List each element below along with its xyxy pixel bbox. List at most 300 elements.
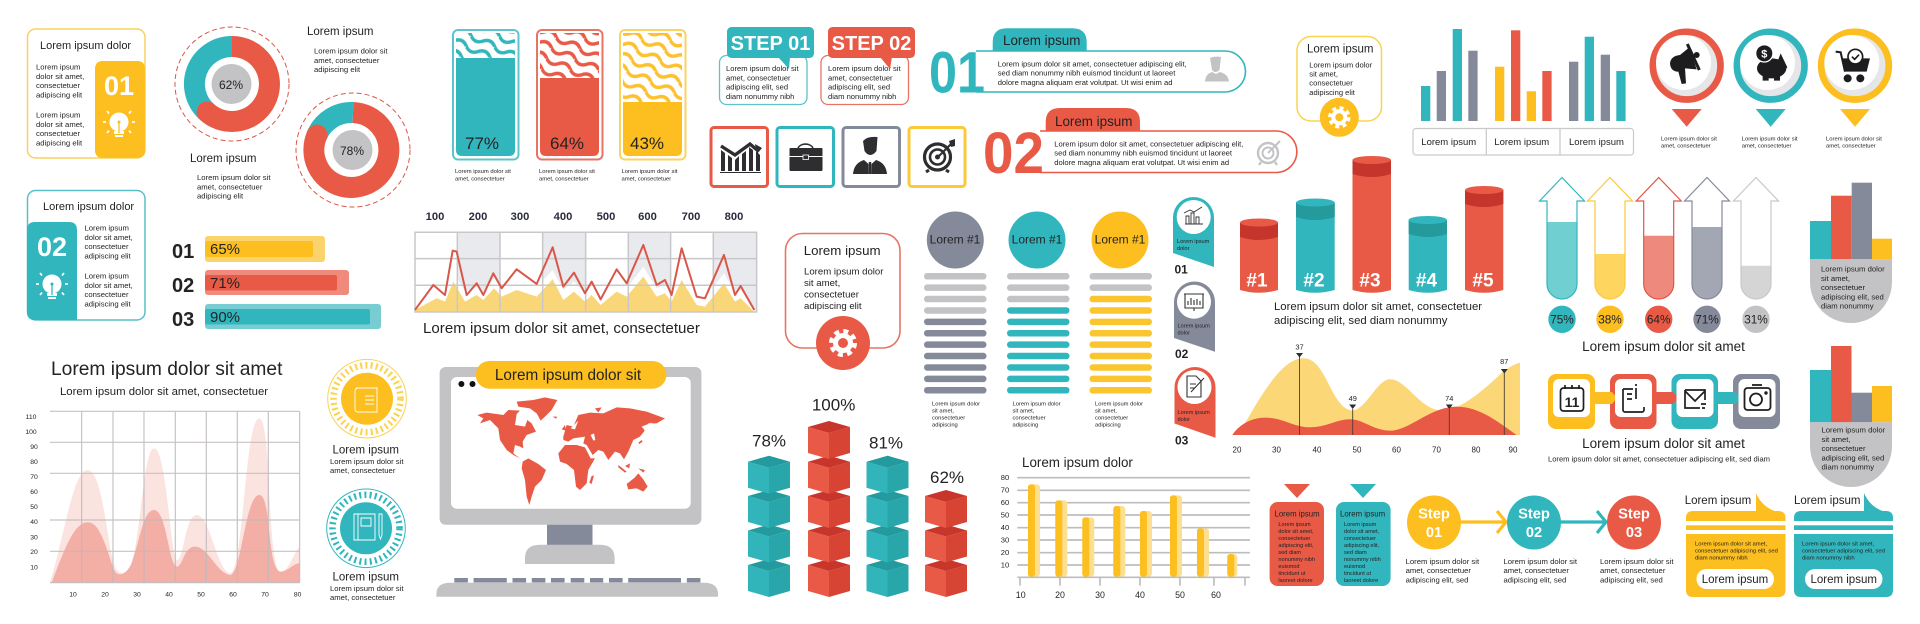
stripe column: teal: adipiscing	[1012, 422, 1038, 428]
step flow	[1406, 496, 1674, 584]
ribbon pin 01: dolor	[1177, 246, 1190, 252]
stack 100%: 100%	[812, 396, 855, 415]
step card 01: adipiscing elit, sed	[726, 82, 788, 92]
ribbon pin 03: dolor	[1178, 417, 1190, 423]
area chart: pink peaks: 50	[197, 592, 205, 598]
step 02	[1504, 496, 1578, 584]
card: teal with triangle: consectetuer	[1344, 536, 1376, 542]
bar chart: yellow bars: 50	[1175, 590, 1185, 600]
card: teal with triangle	[1336, 484, 1391, 586]
bars and bowl 1: sit amet,	[1821, 274, 1850, 283]
area chart: pink peaks: 70	[261, 592, 269, 598]
step 01: Step	[1418, 506, 1450, 522]
bars and bowl 2: adipiscing elit, sed	[1822, 453, 1884, 462]
card: teal with triangle: Lorem ipsum	[1340, 510, 1385, 518]
gauge: 43%: Lorem ipsum dolor sit	[622, 169, 678, 175]
callout: red with gear: consectetuer	[804, 290, 860, 300]
text block: card 01: dolor sit amet,	[36, 120, 84, 129]
badge: teal notebook: amet, consectetuer	[330, 593, 396, 602]
text block: card 01: Lorem ipsum	[36, 62, 80, 72]
bar chart: yellow bars: 30	[1095, 590, 1105, 600]
icon: grey person	[1205, 57, 1229, 82]
area chart: yellow and red with markers: 87	[1500, 357, 1508, 366]
process flow icons	[1548, 374, 1780, 429]
heading: process flow bottom	[1548, 436, 1770, 464]
banner 02: Lorem ipsum dolor sit amet, consectetuer adipiscing elit,	[1054, 140, 1243, 148]
progress bars 01-03: 03	[172, 309, 194, 331]
icon: megaphone	[1670, 44, 1700, 84]
gauge: 64%: Lorem ipsum dolor sit	[539, 169, 595, 175]
teal tab with number and bulb: 02	[37, 232, 67, 262]
area chart: pink peaks: 100	[25, 429, 37, 436]
text: donut 62 caption: adipiscing elit	[197, 192, 244, 200]
area chart: pink peaks: 40	[30, 519, 38, 526]
title pill: Lorem ipsum dolor sit	[495, 367, 642, 384]
text block: card 01: dolor sit amet,	[36, 72, 84, 81]
map pin: piggy bank: amet, consectetuer	[1742, 144, 1791, 150]
area chart: pink peaks: 40	[165, 592, 173, 598]
speech card: teal: Lorem ipsum	[1810, 574, 1877, 586]
arrow tube 75%	[1540, 178, 1584, 333]
area chart: pink peaks: 60	[229, 592, 237, 598]
line chart with yellow area	[415, 211, 757, 337]
speech card: teal: consectetuer adipiscing elit, sed	[1802, 549, 1885, 555]
card: red with triangle: Lorem ipsum	[1274, 510, 1320, 518]
step 03	[1600, 496, 1674, 584]
stripe column: grey: adipiscing	[932, 422, 958, 428]
banner 02: 02	[983, 121, 1044, 186]
step 03: amet, consectetuer	[1600, 566, 1666, 575]
banner 01: Lorem ipsum dolor sit amet, consectetuer adipiscing elit,	[998, 60, 1187, 68]
banner 02	[983, 108, 1297, 186]
badge: yellow book: amet, consectetuer	[330, 466, 396, 475]
ribbon pin 02: Lorem ipsum	[1178, 324, 1210, 330]
area chart: pink peaks: 80	[294, 592, 302, 598]
gauge: 77%	[453, 30, 518, 182]
text block: card 02: adipiscing elit	[84, 299, 132, 308]
cylinder #3: #3	[1359, 270, 1381, 292]
step 02: amet, consectetuer	[1504, 566, 1569, 575]
gauge: 77%: 77%	[465, 134, 499, 153]
icon: calendar	[1560, 385, 1584, 411]
stripe column: yellow: consectetuer	[1095, 416, 1128, 422]
arrow tube 38%	[1588, 178, 1632, 333]
gauge: 43%	[620, 30, 686, 182]
arrow tube 38%: 38%	[1598, 312, 1622, 326]
bars and bowl 2: Lorem ipsum dolor	[1822, 426, 1886, 434]
step card 02: adipiscing elit, sed	[828, 82, 890, 92]
arrow tube 31%	[1734, 178, 1778, 333]
banner 01: Lorem ipsum	[1003, 33, 1080, 48]
arrow: step 1 to 2	[1460, 511, 1506, 533]
stack 62%: 62%	[930, 468, 964, 487]
stripe column: teal: Lorem #1	[1012, 232, 1063, 246]
map pin: piggy bank: Lorem ipsum dolor sit	[1742, 136, 1798, 142]
bar chart: yellow bars: 40	[1135, 590, 1145, 600]
area chart: pink peaks: 90	[30, 444, 38, 451]
stripe column: yellow	[1090, 212, 1152, 428]
step 01: adipiscing elit, sed	[1406, 575, 1468, 584]
heading: card 02: Lorem ipsum dolor	[43, 201, 134, 213]
legend table: Lorem ipsum	[1421, 137, 1476, 148]
step card 01: amet, consectetuer	[726, 73, 791, 82]
speech card: teal	[1794, 493, 1893, 597]
card: red with triangle: tincidunt ut	[1278, 571, 1306, 577]
card: teal with triangle: tincidunt ut	[1344, 571, 1371, 577]
card: red with triangle: adipiscing elit,	[1278, 543, 1314, 549]
bars and bowl 1: diam nonummy	[1821, 302, 1874, 310]
ribbon pin 03: Lorem ipsum	[1178, 410, 1210, 416]
axis labels	[426, 211, 743, 223]
callout: yellow with gear: adipiscing elit	[1309, 88, 1356, 97]
callout: yellow with gear: sit amet,	[1309, 70, 1338, 79]
bars and bowl 2: consectetuer	[1822, 444, 1866, 453]
card: red with triangle: sed diam	[1278, 550, 1301, 556]
cylinder #3	[1352, 156, 1391, 293]
callout: red with gear: Lorem ipsum dolor	[804, 266, 884, 278]
card: teal with triangle: Lorem ipsum	[1344, 522, 1377, 528]
panel: card 01	[28, 29, 145, 158]
bar chart: yellow bars: 20	[1055, 590, 1065, 600]
badge: teal notebook: Lorem ipsum	[332, 572, 399, 584]
bar chart: yellow bars: 40	[1001, 523, 1009, 532]
stand and keyboard	[436, 525, 718, 597]
stripe column: grey: Lorem #1	[930, 232, 981, 246]
text: donut 62 caption	[190, 153, 271, 200]
step card 01	[720, 27, 814, 104]
area chart: pink peaks	[25, 411, 302, 598]
axis labels: 800	[725, 211, 743, 223]
bars and bowl 1: adipiscing elit, sed	[1821, 292, 1884, 301]
legend table: Lorem ipsum	[1494, 137, 1549, 148]
speech card: yellow: Lorem ipsum	[1702, 574, 1768, 586]
text: donut 62 caption: amet, consectetuer	[197, 182, 263, 191]
stripe column: yellow: Lorem #1	[1095, 232, 1146, 246]
axis labels: 500	[597, 211, 615, 223]
bar chart: yellow bars: 50	[1001, 510, 1009, 520]
donut chart: 62%	[175, 27, 289, 141]
area chart: yellow and red with markers: 50	[1353, 446, 1362, 454]
axis labels: 700	[682, 211, 700, 223]
area chart: pink peaks: 80	[30, 459, 38, 466]
step 03: Step	[1618, 506, 1650, 522]
text: donut 78 caption	[307, 26, 388, 74]
gauge: 43%: 43%	[630, 134, 664, 153]
step 02: Lorem ipsum dolor sit	[1504, 557, 1578, 566]
banner 01: dolore magna aliquam erat volutpat. Ut wisi enim ad	[998, 78, 1172, 87]
text block: card 02: consectetuer	[84, 242, 129, 251]
stripe column: teal	[1007, 212, 1070, 428]
axis labels: 100	[426, 211, 444, 223]
heading: process flow bottom: Lorem ipsum dolor sit amet, consectetuer adipiscing elit, sed diam	[1548, 454, 1770, 464]
banner 02: Lorem ipsum	[1055, 114, 1132, 129]
chart caption: Lorem ipsum dolor sit amet, consectetuer	[423, 320, 700, 337]
callout: red with gear	[786, 234, 900, 370]
cylinder #4	[1409, 216, 1447, 293]
banner 01	[929, 28, 1246, 105]
badge: yellow book: Lorem ipsum dolor sit	[330, 457, 404, 466]
banner 01: sed diam nonummy nibh euismod tincidunt ut laoreet	[998, 69, 1176, 78]
icon: chart box	[711, 128, 768, 186]
text block: card 02: dolor sit amet,	[84, 281, 133, 290]
donut chart: 78%: 78%	[340, 144, 364, 158]
bars and bowl 1	[1810, 183, 1892, 323]
map pin: megaphone: amet, consectetuer	[1661, 144, 1711, 150]
bar chart: yellow bars: 10	[1016, 590, 1026, 600]
icon: document	[1623, 384, 1644, 412]
bar chart: yellow bars: 10	[1001, 560, 1009, 570]
step card 02: diam nonummy nibh	[828, 92, 896, 101]
card: teal with triangle: dolor sit amet,	[1344, 529, 1380, 535]
map pin: shopping cart: Lorem ipsum dolor sit	[1826, 136, 1882, 142]
text block: card 02: Lorem ipsum	[84, 272, 129, 280]
step card 01: STEP 01	[731, 33, 810, 55]
gauge: 64%: 64%	[550, 134, 584, 153]
icon: person box	[843, 128, 900, 186]
title pill	[476, 361, 666, 389]
world map	[477, 397, 665, 505]
text: donut 62 caption: Lorem ipsum	[190, 153, 256, 165]
legend table	[1413, 128, 1634, 155]
step 03: Lorem ipsum dolor sit	[1600, 557, 1674, 566]
icon: grey target	[1258, 141, 1280, 165]
text block: card 01: adipiscing elit	[36, 90, 83, 99]
stack 81%	[866, 434, 908, 597]
stripe column: teal: sit amet,	[1012, 408, 1035, 414]
icon: target box	[909, 128, 965, 186]
icon: mini chart	[1184, 207, 1203, 224]
text: donut 78 caption: adipiscing elit	[314, 65, 361, 74]
screen bezel	[440, 367, 701, 525]
arrow tube 71%	[1684, 178, 1730, 333]
text block: card 02: dolor sit amet,	[84, 233, 133, 242]
text block: card 01: adipiscing elit	[36, 138, 83, 147]
card: teal with triangle: nonummy nibh	[1344, 557, 1381, 563]
area chart: yellow and red with markers	[1232, 342, 1520, 454]
axis labels: 300	[511, 211, 529, 223]
ribbon pin 01: Lorem ipsum	[1177, 239, 1210, 245]
speech card: teal: Lorem ipsum	[1794, 495, 1860, 507]
callout: yellow with gear: Lorem ipsum dolor	[1309, 60, 1373, 70]
text: donut 78 caption: Lorem ipsum dolor sit	[314, 46, 388, 56]
heading: left chart: Lorem ipsum dolor sit amet, consectetuer	[60, 386, 268, 398]
ribbon pin 02	[1174, 282, 1215, 361]
gauge: 77%: Lorem ipsum dolor sit	[455, 169, 511, 175]
step 01: 01	[1426, 525, 1442, 541]
ribbon pin 03: 03	[1175, 434, 1189, 448]
area chart: yellow and red with markers: 74	[1445, 394, 1453, 403]
bars and bowl 2	[1810, 346, 1892, 487]
stripe column: yellow: Lorem ipsum dolor	[1095, 402, 1143, 408]
area chart: pink peaks: 10	[69, 592, 77, 598]
bar chart: yellow bars	[1001, 455, 1250, 600]
area chart: yellow and red with markers: 70	[1432, 446, 1441, 454]
arrow tube 31%: 31%	[1744, 312, 1768, 326]
speech card: yellow: Lorem ipsum	[1685, 495, 1751, 507]
text block: card 01: consectetuer	[36, 129, 80, 138]
heading: process flow bottom: Lorem ipsum dolor sit amet	[1582, 436, 1745, 451]
area chart: yellow and red with markers: 80	[1472, 446, 1481, 454]
step 01	[1406, 496, 1480, 584]
map pin: shopping cart	[1821, 32, 1889, 150]
gauge: 64%: amet, consectetuer	[539, 176, 589, 182]
heading: card 01: Lorem ipsum dolor	[40, 40, 131, 52]
heading: process flow top: Lorem ipsum dolor sit amet	[1582, 339, 1745, 354]
callout: red with gear: Lorem ipsum	[804, 243, 881, 258]
bar chart: yellow bars: 20	[1001, 548, 1009, 557]
ribbon pin 03	[1174, 367, 1216, 448]
bar chart: yellow bars: 70	[1001, 486, 1009, 495]
banner 02: dolore magna aliquam erat volutpat. Ut wisi enim ad	[1054, 158, 1229, 167]
banner 02: sed diam nonummy nibh euismod tincidunt ut laoreet	[1054, 149, 1233, 158]
cylinder #4: #4	[1416, 270, 1437, 292]
icon: mini document and pen	[1187, 376, 1204, 397]
arrow tube 71%: 71%	[1695, 312, 1719, 326]
icon: calendar: 11	[1565, 394, 1580, 410]
caption: adipiscing elit, sed diam nonummy	[1274, 315, 1448, 327]
area chart: pink peaks: 50	[30, 504, 38, 511]
map pin: shopping cart: amet, consectetuer	[1826, 144, 1876, 150]
area chart: yellow and red with markers: 49	[1349, 394, 1357, 403]
icon: briefcase box	[777, 128, 834, 186]
badge: yellow book	[328, 359, 406, 475]
map pin: piggy bank	[1737, 32, 1804, 150]
heading: left chart: Lorem ipsum dolor sit amet	[51, 359, 283, 380]
ribbon pin 01	[1173, 197, 1214, 276]
card: red with triangle: nonummy nibh	[1278, 557, 1315, 563]
area chart: pink peaks: 20	[101, 592, 109, 598]
text: donut 78 caption: amet, consectetuer	[314, 56, 380, 65]
bar chart: yellow bars: 80	[1001, 473, 1009, 482]
step 02: Step	[1518, 506, 1550, 522]
card: red with triangle: dolor sit amet,	[1278, 529, 1314, 535]
progress bars 01-03: 01	[172, 241, 194, 263]
area chart: yellow and red with markers: 60	[1392, 446, 1401, 454]
icon: piggy bank: $	[1761, 48, 1767, 60]
step card 02: Lorem ipsum dolor sit	[828, 64, 901, 73]
icon: mail	[1685, 390, 1706, 408]
card: red with triangle	[1270, 484, 1324, 586]
icon: cart	[1836, 49, 1870, 82]
stripe column: teal: consectetuer	[1012, 416, 1046, 422]
card: teal with triangle: laoreet dolore	[1344, 578, 1378, 584]
progress bars 01-03: 90%	[210, 309, 240, 326]
progress bars 01-03: 65%	[210, 241, 240, 258]
icon: camera	[1744, 385, 1770, 410]
banner 01: 01	[929, 40, 985, 106]
icon: book	[355, 388, 377, 412]
text block: card 02: Lorem ipsum	[84, 224, 129, 232]
stack 78%	[748, 432, 790, 597]
callout: red with gear: sit amet,	[804, 278, 840, 289]
speech card: yellow: diam nonummy nibh	[1695, 556, 1748, 562]
step 02: adipiscing elit, sed	[1504, 575, 1566, 584]
step 01: Lorem ipsum dolor sit	[1406, 557, 1480, 566]
card: teal with triangle: sed diam	[1344, 550, 1367, 556]
callout: red with gear: adipiscing elit	[804, 301, 862, 312]
speech card: yellow: consectetuer adipiscing elit, sed	[1695, 549, 1778, 555]
bar chart: yellow bars: 30	[1001, 536, 1009, 544]
stack 78%: 78%	[752, 432, 786, 451]
text: donut 62 caption: Lorem ipsum dolor sit	[197, 173, 271, 182]
stripe column: teal: Lorem ipsum dolor	[1012, 402, 1061, 408]
axis labels: 400	[554, 211, 572, 223]
bar chart: yellow bars: 60	[1211, 590, 1221, 600]
ribbon pin 02: dolor	[1178, 330, 1190, 336]
progress bars 01-03	[172, 236, 381, 331]
step card 02: amet, consectetuer	[828, 73, 893, 82]
map pin: megaphone	[1653, 32, 1720, 150]
stripe column: grey: Lorem ipsum dolor	[932, 402, 980, 408]
ribbon pin 01: 01	[1174, 262, 1188, 276]
bar chart: grouped bars	[1413, 29, 1634, 155]
step 03: adipiscing elit, sed	[1600, 575, 1663, 584]
card: teal with triangle: adipiscing elit,	[1344, 543, 1380, 549]
area chart: yellow and red with markers: 20	[1233, 446, 1242, 454]
area chart: pink peaks: 60	[30, 489, 38, 496]
callout: yellow with gear	[1297, 36, 1382, 137]
caption: Lorem ipsum dolor sit amet, consectetuer	[1274, 301, 1482, 313]
axis labels: 600	[638, 211, 657, 223]
stripe column: yellow: adipiscing	[1095, 422, 1121, 428]
cylinder #5	[1465, 186, 1503, 293]
bar chart: yellow bars: Lorem ipsum dolor	[1022, 455, 1133, 470]
area chart: pink peaks: 20	[30, 549, 38, 556]
card: red with triangle: euismod	[1278, 564, 1300, 570]
monitor with world map	[436, 361, 718, 597]
area chart: yellow and red with markers: 30	[1272, 446, 1281, 454]
gauge: 64%	[537, 30, 602, 182]
step 02: 02	[1526, 525, 1542, 541]
gauge: 77%: amet, consectetuer	[455, 176, 505, 182]
badge: yellow book: Lorem ipsum	[332, 444, 399, 456]
stripe column: grey	[924, 212, 986, 428]
callout: yellow with gear: consectetuer	[1309, 79, 1353, 88]
text block: card 02: adipiscing elit	[84, 251, 132, 260]
cylinder #2	[1296, 198, 1335, 293]
stripe column: grey: consectetuer	[932, 416, 965, 422]
arrow tube 75%: 75%	[1550, 312, 1574, 326]
step 03: 03	[1626, 525, 1642, 541]
cylinder #2: #2	[1303, 270, 1325, 292]
step card 01: diam nonummy nibh	[726, 92, 794, 101]
card: red with triangle: laoreet dolore	[1278, 578, 1313, 584]
area chart: yellow and red with markers: 40	[1313, 446, 1322, 454]
bars and bowl 2: diam nonummy	[1822, 462, 1874, 472]
heading: left chart	[51, 359, 283, 398]
bar chart: yellow bars: 60	[1001, 498, 1009, 507]
step 01: amet, consectetuer	[1406, 566, 1471, 575]
card: red with triangle: consectetuer	[1278, 536, 1311, 542]
area chart: yellow and red with markers: 37	[1295, 342, 1304, 352]
icon: notebook	[354, 514, 382, 540]
speech card: teal: diam nonummy nibh	[1802, 556, 1855, 562]
progress bars 01-03: 02	[172, 275, 194, 297]
stripe column: grey: sit amet,	[932, 408, 954, 414]
donut chart: 78%	[296, 93, 410, 207]
stripe column: yellow: sit amet,	[1095, 408, 1117, 414]
card: red with triangle: Lorem ipsum	[1278, 522, 1311, 528]
bars and bowl 1: Lorem ipsum dolor	[1821, 264, 1885, 274]
bars and bowl 2: sit amet,	[1822, 435, 1851, 444]
area chart: pink peaks: 110	[26, 414, 37, 421]
cylinder #1	[1240, 218, 1278, 293]
bars and bowl 1: consectetuer	[1821, 283, 1865, 292]
arrow tube 64%	[1636, 178, 1681, 333]
step card 02	[821, 27, 915, 104]
step card 01: Lorem ipsum dolor sit	[726, 64, 799, 73]
cylinder bar chart	[1240, 156, 1503, 327]
